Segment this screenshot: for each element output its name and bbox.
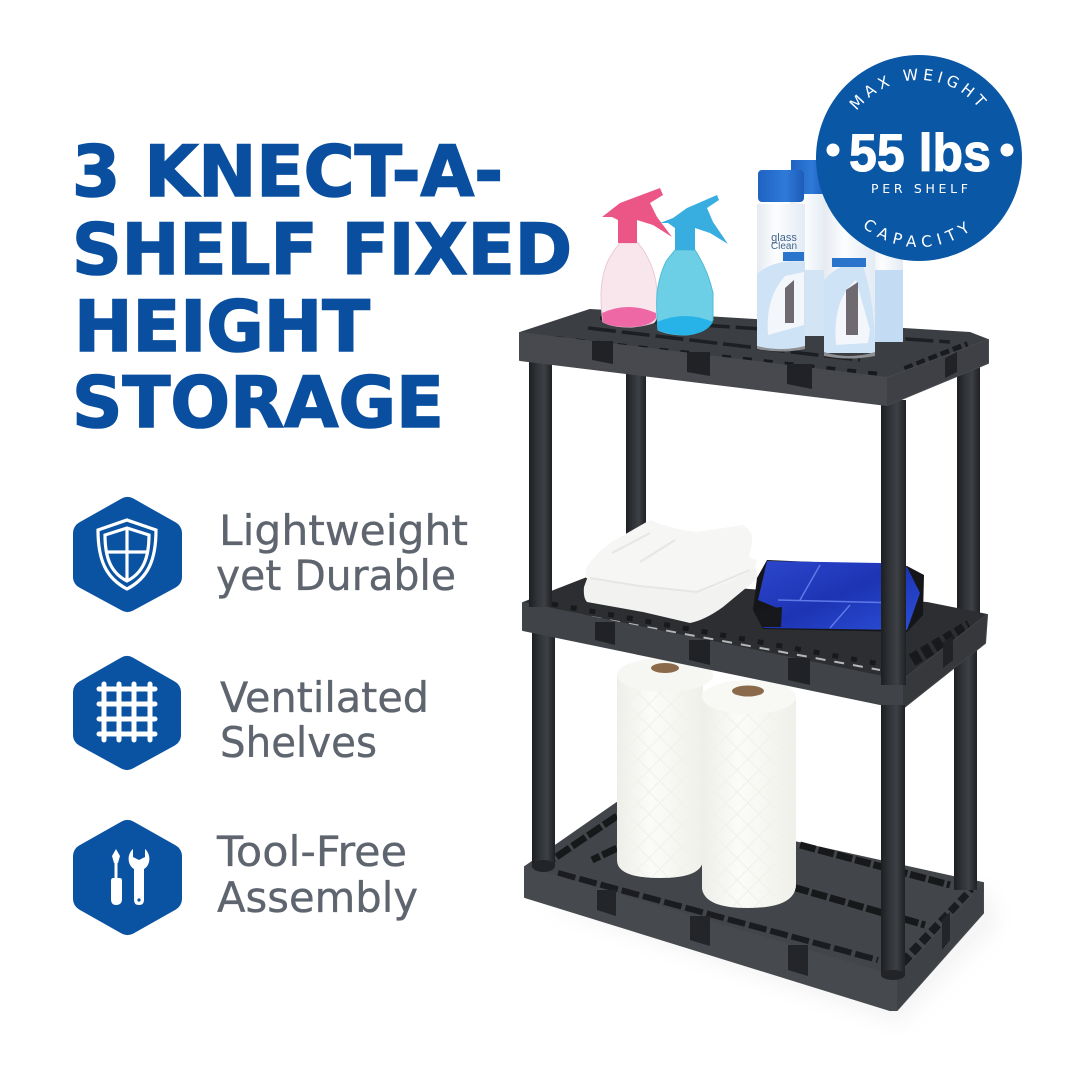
front right pole upper — [881, 400, 906, 685]
text: lightweight yet durable: yet Durable — [216, 551, 456, 600]
badge: max weight — [816, 55, 1022, 261]
front left pole lower — [532, 625, 555, 872]
lower towel — [584, 566, 758, 623]
text: tool-free assembly: Assembly — [217, 873, 418, 922]
right roll — [702, 680, 796, 908]
badge arc: capacity: CAPACITY — [864, 220, 968, 247]
icon: tools in hexagon — [85, 832, 170, 923]
feature: ventilated shelves — [85, 668, 429, 767]
floor shadow — [540, 890, 1000, 1025]
paper towel rolls — [617, 658, 796, 908]
text: ventilated shelves — [220, 673, 429, 767]
top shelf — [520, 310, 988, 405]
shelf unit with items — [520, 160, 1000, 1025]
towels — [584, 520, 758, 623]
blue spray bottle — [657, 195, 728, 335]
feature: lightweight yet durable — [85, 506, 468, 600]
front left pole upper — [529, 362, 552, 607]
badge dot left — [826, 144, 840, 156]
back right pole lower — [954, 650, 977, 890]
left front can — [757, 170, 805, 352]
pink spray bottle — [601, 188, 672, 327]
left front can: glass — [771, 232, 797, 244]
icon: shield in hexagon — [85, 509, 170, 600]
title — [72, 131, 572, 444]
badge arc: max weight: MAX WEIGHT — [849, 68, 988, 110]
text: tool-free assembly: Tool-Free — [216, 827, 407, 876]
back can — [790, 160, 826, 336]
badge value: 55 lbs: 55 lbs — [849, 124, 991, 183]
text: ventilated shelves: Ventilated — [220, 673, 429, 722]
title: STORAGE — [72, 362, 444, 444]
title: SHELF FIXED — [72, 209, 572, 291]
back left pole upper — [626, 370, 646, 535]
icon: grid in hexagon — [85, 668, 169, 758]
back right pole upper — [957, 365, 980, 620]
front right pole lower — [881, 705, 905, 980]
upper towel — [586, 520, 757, 593]
left roll — [617, 658, 713, 878]
text: tool-free assembly — [216, 827, 418, 922]
feature: tool-free assembly — [85, 827, 418, 923]
text: lightweight yet durable: Lightweight — [219, 506, 468, 555]
bottom shelf — [525, 803, 983, 1010]
title: 3 KNECT-A- — [72, 131, 503, 213]
spray cans — [757, 160, 903, 358]
text: lightweight yet durable — [216, 506, 468, 600]
left front can: Clean — [771, 241, 797, 252]
title: HEIGHT — [74, 286, 370, 368]
middle shelf — [523, 578, 987, 708]
rear right can — [868, 240, 903, 342]
right front can — [824, 205, 875, 358]
badge dot right — [1000, 144, 1014, 156]
text: ventilated shelves: Shelves — [220, 718, 377, 767]
badge text: per shelf: PER SHELF — [871, 181, 968, 196]
blue bag — [753, 560, 924, 632]
